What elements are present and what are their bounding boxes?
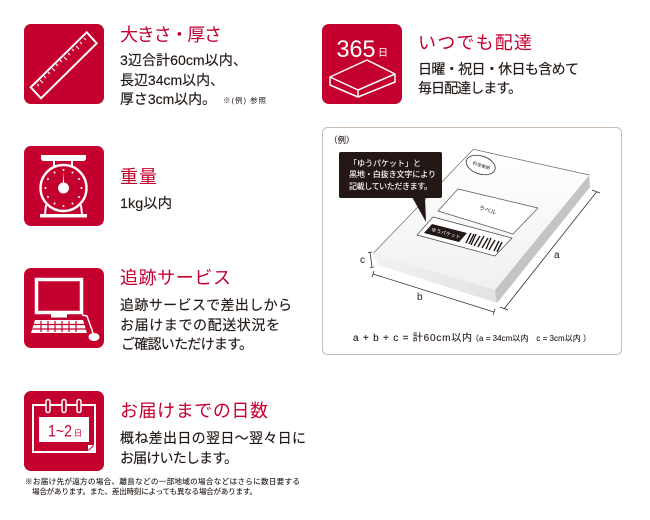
- stamp: 料金後納: [472, 159, 492, 172]
- label: example: （例）: [329, 135, 355, 145]
- icon: calendar: [24, 391, 104, 471]
- callout: 黒地・白抜き文字により: [349, 169, 436, 179]
- formula: （a = 34cm以内 c = 3cm以内 ）: [471, 333, 591, 343]
- text: size limits: 3辺合計60cm以内、: [120, 52, 247, 68]
- diagram: packet: [339, 149, 590, 303]
- address label: [438, 189, 538, 234]
- panel: size and thickness: [24, 24, 266, 107]
- barcode label: ゆうパケット: [430, 226, 461, 241]
- text: tracking description: [120, 297, 292, 352]
- panel: every day delivery: [322, 24, 579, 104]
- icon: 365 days box: 365: [336, 36, 376, 63]
- text: size limits: 長辺34cm以内、: [120, 72, 224, 88]
- dimension c: [360, 252, 374, 268]
- icon: calendar: 1~2: [48, 422, 72, 440]
- heading: days: お届けまでの日数: [120, 401, 268, 421]
- dimension a: a: [554, 250, 560, 261]
- panel: weight: [24, 146, 172, 226]
- icon: ruler: [24, 24, 104, 104]
- text: days description: お届けいたします。: [120, 450, 238, 466]
- footnote: 場合があります。また、差出時刻によっても異なる場合があります。: [32, 486, 257, 496]
- icon: calendar: 日: [74, 429, 82, 438]
- text: every day description: 日曜・祝日・休日も含めて: [418, 61, 579, 77]
- callout: [339, 152, 442, 222]
- text: tracking description: お届けまでの配送状況を: [120, 317, 280, 333]
- text: weight limit: 1kg以内: [120, 195, 172, 211]
- footnote: ※お届け先が遠方の場合、離島などの一部地域の場合などはさらに数日要する: [25, 476, 300, 486]
- text: size limits: [120, 52, 266, 107]
- formula: a + b + c = 計60cm以内: [353, 331, 472, 344]
- heading: tracking: 追跡サービス: [120, 268, 231, 288]
- footnote: [25, 476, 300, 496]
- text: days description: [120, 430, 306, 466]
- text: every day description: [418, 61, 579, 96]
- icon: 365 days box: [322, 24, 402, 104]
- heading: size: 大きさ・厚さ: [120, 25, 222, 45]
- text: tracking description: 追跡サービスで差出しから: [120, 297, 292, 313]
- panel: example diagram: [322, 128, 622, 354]
- heading: weight: 重量: [120, 167, 157, 187]
- text: tracking description: ご確認いただけます。: [121, 336, 253, 352]
- heading: every day: いつでも配達: [418, 33, 532, 53]
- text: days description: 概ね差出日の翌日～翌々日に: [120, 430, 306, 446]
- callout: 「ゆうパケット」と: [349, 159, 421, 168]
- dimension b: b: [417, 292, 423, 303]
- icon: 365 days box: 日: [378, 48, 388, 59]
- callout: 記載していただきます。: [349, 181, 432, 191]
- text: size limits: 厚さ3cm以内。: [120, 91, 216, 107]
- panel: delivery days: [24, 391, 306, 471]
- stamp: [464, 152, 498, 178]
- text: size limits: ※(例) 参照: [223, 95, 266, 105]
- address label: ラベル: [478, 204, 497, 217]
- icon: computer: [24, 268, 104, 348]
- dimension c: c: [360, 255, 365, 266]
- dimension a: [500, 190, 600, 310]
- panel: tracking service: [24, 268, 292, 352]
- formula: [353, 331, 591, 344]
- icon: scale: [24, 146, 104, 226]
- barcode label: [417, 217, 512, 256]
- dimension b: [372, 271, 495, 315]
- text: every day description: 毎日配達します。: [418, 80, 522, 96]
